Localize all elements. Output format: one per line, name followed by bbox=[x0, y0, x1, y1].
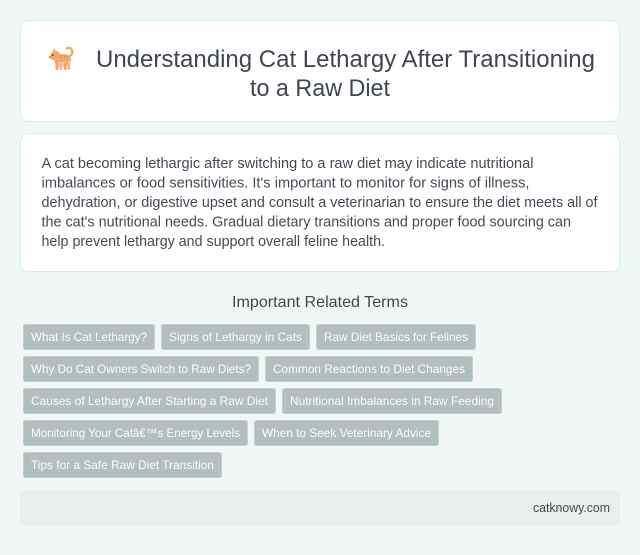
tag: raw diet basics bbox=[316, 324, 476, 350]
tag: monitoring: Monitoring Your Catâ€™s Energy Levels bbox=[31, 426, 240, 440]
footer: catknowy.com bbox=[533, 500, 610, 515]
heading: related terms: Important Related Terms bbox=[232, 294, 408, 311]
title: Understanding Cat Lethargy After Transitioning bbox=[96, 46, 595, 73]
text block: summary paragraph: dehydration, or digestive upset and consult a veterinarian to ensure the diet meets all of bbox=[42, 195, 598, 211]
tag: when to seek advice: When to Seek Veterinary Advice bbox=[262, 426, 431, 440]
title: to a Raw Diet bbox=[250, 75, 390, 102]
tag: monitoring bbox=[24, 420, 248, 446]
tag: common reactions: Common Reactions to Diet Changes bbox=[273, 362, 465, 376]
tag: tips bbox=[24, 452, 222, 478]
tag: signs of lethargy: Signs of Lethargy in Cats bbox=[169, 330, 302, 344]
tag: what is cat lethargy bbox=[24, 324, 154, 350]
text block: summary paragraph: imbalances or food sensitivities. It's important to monitor for signs of illness, bbox=[42, 176, 530, 192]
tag: when to seek advice bbox=[254, 420, 438, 446]
tag list bbox=[24, 324, 502, 478]
text block: summary paragraph: help prevent lethargy and support overall feline health. bbox=[42, 234, 385, 250]
tag: raw diet basics: Raw Diet Basics for Felines bbox=[324, 330, 468, 344]
text block: summary paragraph: the cat's nutritional needs. Gradual dietary transitions and proper food sourcing can bbox=[42, 214, 571, 230]
tag: causes: Causes of Lethargy After Starting a Raw Diet bbox=[31, 394, 269, 408]
tag: causes bbox=[24, 388, 276, 414]
text block: summary paragraph: A cat becoming lethargic after switching to a raw diet may indicate nutritional bbox=[42, 156, 534, 172]
tag: what is cat lethargy: What Is Cat Lethargy? bbox=[31, 330, 147, 344]
text block: summary paragraph bbox=[42, 156, 598, 250]
tag: tips: Tips for a Safe Raw Diet Transition bbox=[31, 458, 214, 472]
tag: common reactions bbox=[266, 356, 472, 382]
panel: title card bbox=[20, 20, 620, 122]
tag: why switch: Why Do Cat Owners Switch to Raw Diets? bbox=[31, 362, 251, 376]
footer bbox=[20, 491, 620, 525]
icon: cat bbox=[49, 48, 72, 70]
tag: signs of lethargy bbox=[162, 324, 310, 350]
tag: why switch bbox=[24, 356, 258, 382]
tag: nutritional imbalances bbox=[282, 388, 502, 414]
tag: nutritional imbalances: Nutritional Imbalances in Raw Feeding bbox=[290, 394, 494, 408]
title bbox=[96, 46, 595, 102]
panel: summary bbox=[20, 134, 620, 272]
